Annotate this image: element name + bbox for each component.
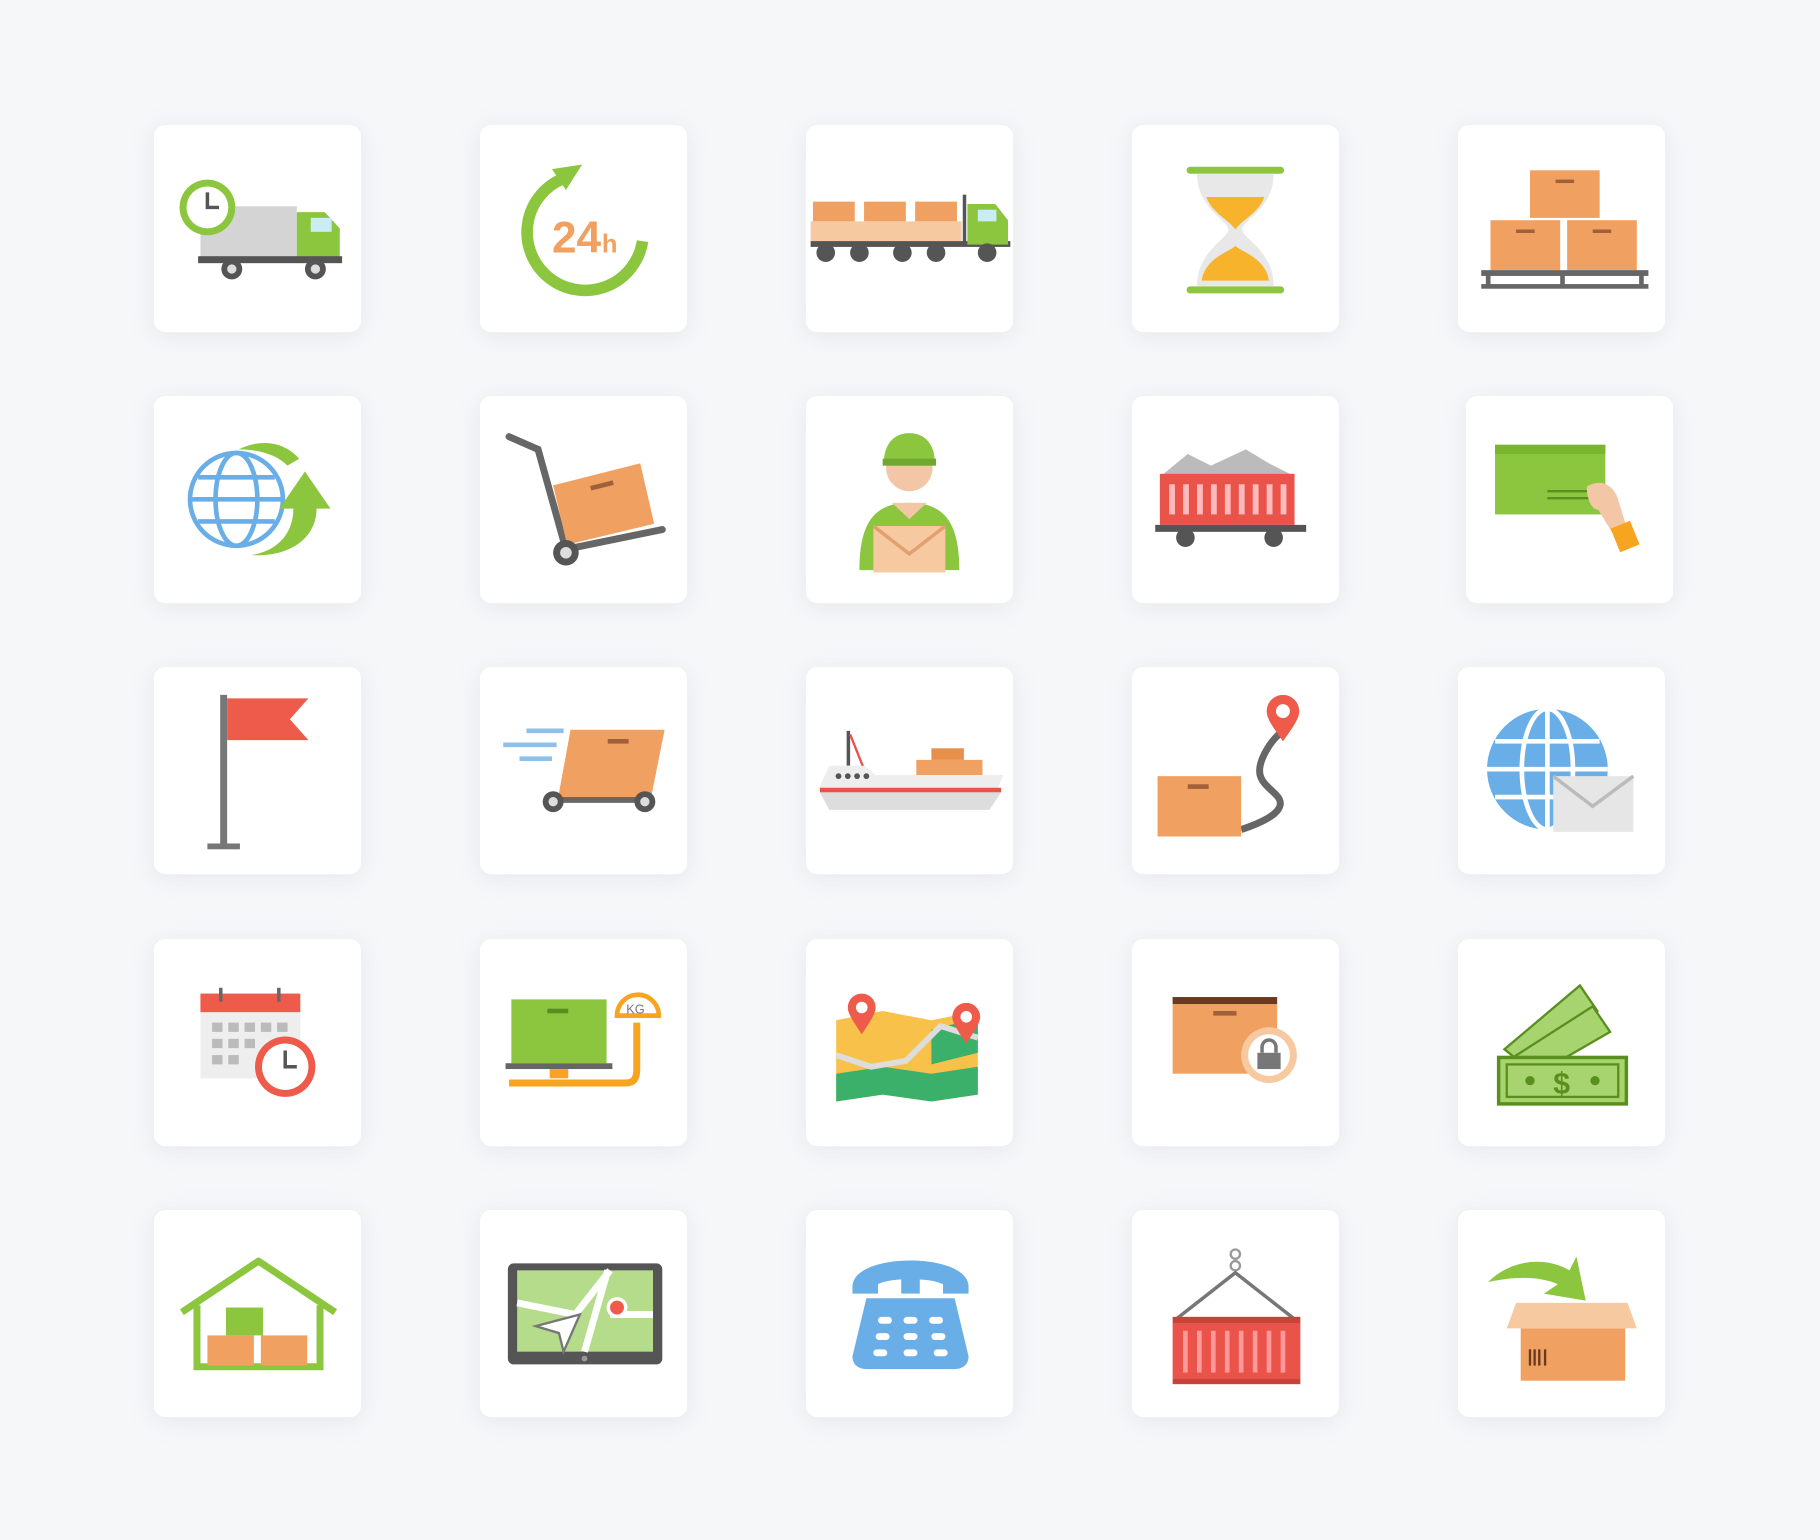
card: globe email <box>1457 666 1666 875</box>
card: warehouse <box>153 1209 362 1418</box>
card: hand truck <box>479 395 688 604</box>
card: hourglass <box>1131 124 1340 333</box>
card: map with pins <box>805 938 1014 1147</box>
card: courier person <box>805 395 1014 604</box>
card: railway car <box>1131 395 1340 604</box>
card: weighing scale: KG <box>626 1001 645 1016</box>
card: secure box <box>1131 938 1340 1147</box>
card: pallet boxes <box>1457 124 1666 333</box>
card: GPS tablet <box>479 1209 688 1418</box>
card: box route <box>1131 666 1340 875</box>
card: truck with clock <box>153 124 362 333</box>
card: 24h service: h <box>602 231 618 259</box>
card: parcel into box <box>1457 1209 1666 1418</box>
card: weighing scale <box>479 938 688 1147</box>
card: calendar clock <box>153 938 362 1147</box>
card: flatbed truck <box>805 124 1014 333</box>
card: hoisted container <box>1131 1209 1340 1418</box>
card: money <box>1457 938 1666 1147</box>
card: envelope in hand <box>1465 395 1674 604</box>
card: money: $ <box>1553 1067 1570 1100</box>
card: 24h service <box>479 124 688 333</box>
card: 24h service: 24 <box>552 214 602 263</box>
card: telephone <box>805 1209 1014 1418</box>
card: global shipping <box>153 395 362 604</box>
card: flag <box>153 666 362 875</box>
card: fast delivery cart <box>479 666 688 875</box>
card: cargo ship <box>805 666 1014 875</box>
